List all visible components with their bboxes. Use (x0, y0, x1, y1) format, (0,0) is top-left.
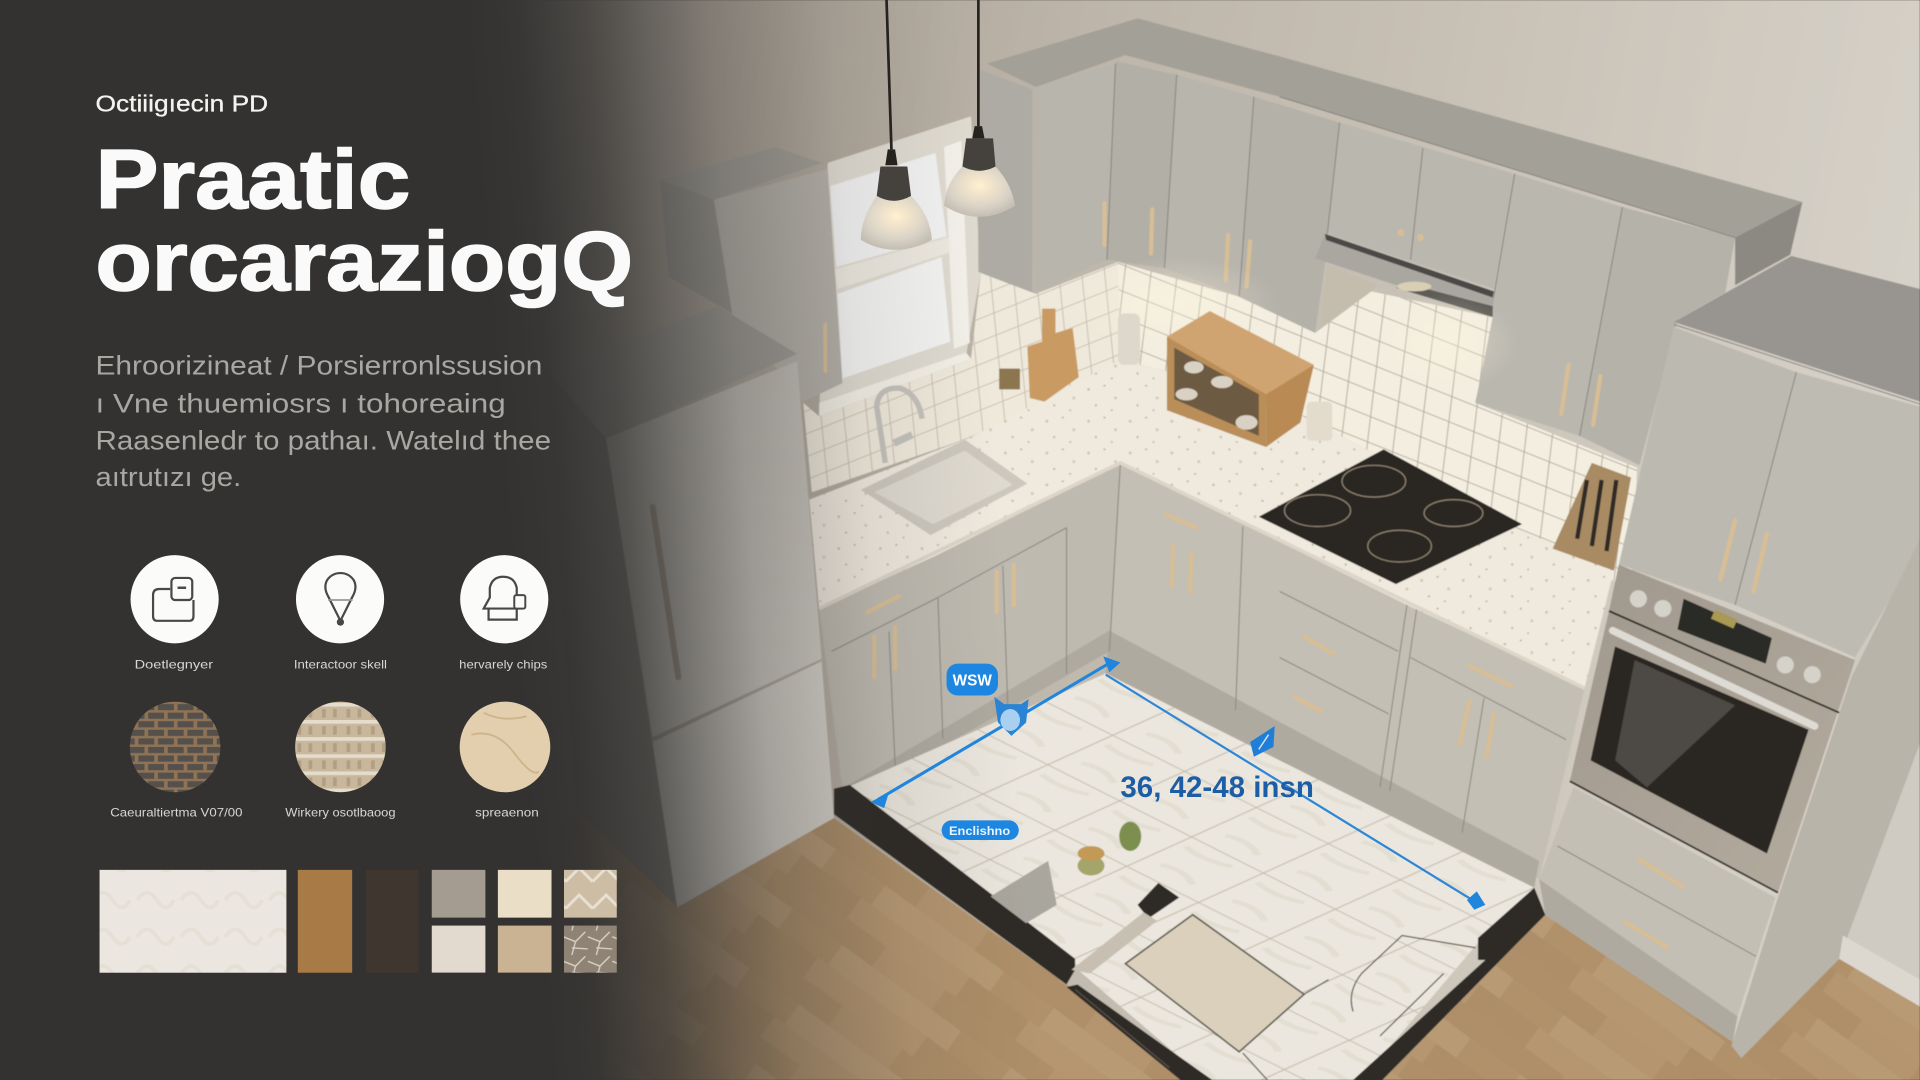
description: ı Vne thuemiosrs ı tohoreaing (96, 389, 506, 419)
swatch: dark brown (366, 870, 419, 973)
floor sketch lines (1075, 936, 1476, 1080)
wood floor (367, 811, 1920, 1080)
mat on floor (1125, 915, 1304, 1052)
label: Doetlegnyer (135, 658, 213, 672)
pendant lights (861, 0, 1015, 250)
depth dimension line (1106, 675, 1485, 910)
material: woven beige (295, 702, 386, 792)
description: Raasenledr to pathaı. Watelıd thee (96, 425, 551, 455)
swatch: taupe (432, 870, 485, 918)
sink and faucet (861, 388, 1027, 535)
description: aıtrutızı ge. (96, 462, 241, 492)
label: Wirkery osotlbaoog (285, 806, 396, 820)
dimension label: 36, 42-48 insn (1120, 771, 1314, 804)
material: light wood (460, 702, 550, 792)
range hood (1315, 234, 1494, 317)
icon: blue diamond (1250, 726, 1275, 757)
WSW pill: WSW (953, 673, 992, 690)
tiled floor with dark border (834, 673, 1545, 1080)
left panel content (96, 90, 633, 973)
swatch: cream (498, 870, 552, 918)
right side panel and wall (1731, 539, 1920, 1058)
WSW pill (947, 664, 998, 696)
description (96, 351, 551, 492)
width dimension line (871, 656, 1120, 808)
eyebrow: Octiiigıecin PD (96, 90, 268, 116)
right tall cabinet (1619, 256, 1920, 658)
material: dark brick (130, 702, 220, 792)
oven (1570, 564, 1855, 893)
lower right drawers (1539, 787, 1776, 1042)
pale floor board (1071, 912, 1157, 973)
swatch: off white (432, 926, 485, 973)
right pendant (944, 0, 1015, 217)
cooktop (1259, 449, 1522, 584)
swatch: sand (498, 926, 552, 973)
L-shaped countertop (809, 360, 1614, 688)
left pendant (861, 0, 932, 250)
icon: cloche with tag (460, 555, 548, 643)
swatch: large white (100, 870, 286, 973)
title: Praatic (96, 133, 410, 226)
icon: light bulb pin (296, 555, 384, 643)
plant decorations (1078, 822, 1141, 876)
label: Caeuraltiertma V07/00 (110, 806, 243, 820)
swatch: cracked stone (564, 926, 617, 973)
description: Ehroorizineat / Porsierronlssusion (96, 351, 542, 381)
swatch: herringbone (564, 870, 617, 918)
small blue pill: Enclishno (949, 824, 1010, 838)
icon: storage box (131, 555, 219, 643)
refrigerator (546, 306, 834, 907)
lower cabinets (819, 463, 1584, 888)
label: spreaenon (475, 806, 539, 820)
counter accessories (999, 309, 1631, 571)
icon: blue shield (994, 697, 1029, 736)
dark floor object (1138, 883, 1179, 918)
grey floor panel (991, 861, 1057, 923)
upper left cabinet (660, 147, 842, 402)
title (96, 133, 633, 308)
dark panel gradient (0, 0, 1102, 1080)
small blue pill (942, 820, 1019, 840)
title: orcaraziogQ (96, 215, 633, 308)
backsplash tile (803, 257, 1637, 590)
swatch: tan wood (298, 870, 352, 973)
label: hervarely chips (459, 658, 547, 672)
measurement annotations (871, 656, 1485, 910)
label: Interactoor skell (294, 658, 387, 672)
window (819, 116, 981, 416)
upper cabinets run (977, 18, 1802, 465)
